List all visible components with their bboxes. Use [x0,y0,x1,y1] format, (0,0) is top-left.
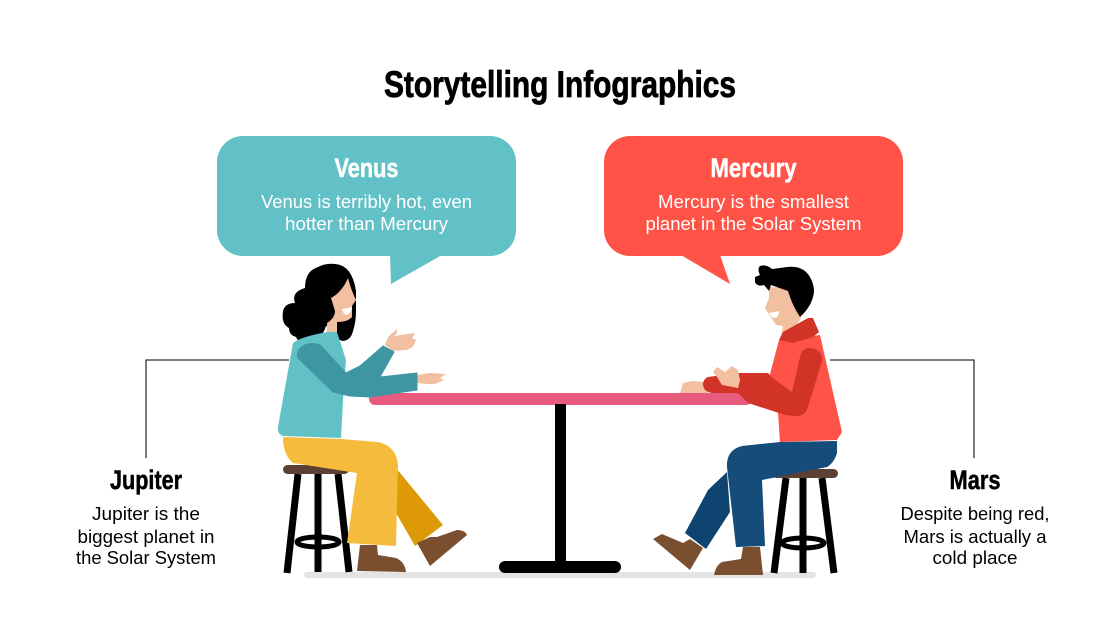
mouth [342,307,352,315]
text block: Jupiter [76,465,216,568]
text block: Mars: Mars [950,465,1000,495]
torso [278,332,346,438]
head [327,278,356,338]
lower hand [680,381,708,393]
callout: Venus speech bubble: hotter than Mercury [285,214,448,234]
front shoe [714,547,763,575]
mouth [769,311,779,318]
text block: Mars: cold place [932,548,1018,568]
woman figure [278,264,467,573]
collar [779,318,819,343]
connector: Jupiter line [146,360,289,458]
callout: Venus speech bubble: Venus [334,153,398,183]
stool: woman [283,465,349,573]
lower hand [417,373,446,384]
raised hand [385,329,416,351]
arm [703,348,822,416]
ground shadow [304,572,816,578]
arms [297,344,417,397]
hair [755,265,814,317]
back leg and shoe [653,472,730,570]
text block: Mars [900,465,1050,568]
table [369,393,752,573]
text block: Mars: Mars is actually a [904,527,1048,547]
text block: Jupiter: biggest planet in [78,527,214,547]
connector: Mars line [830,360,974,458]
front leg [727,441,837,547]
callout: Mercury speech bubble: Mercury [710,153,796,183]
callout: Mercury speech bubble [604,136,903,284]
title: Storytelling Infographics [384,64,736,105]
front shoe [357,545,406,572]
callout: Venus speech bubble [217,136,516,284]
upper hand [713,366,740,388]
torso [770,335,842,442]
callout: Mercury speech bubble: Mercury is the smallest [658,192,849,212]
text block: Jupiter: Jupiter [110,465,182,495]
hair [283,264,356,342]
callout: Venus speech bubble: Venus is terribly hot, even [261,192,472,212]
back leg and shoe [385,468,467,566]
callout: Mercury speech bubble: planet in the Solar System [646,214,862,234]
front leg [283,437,398,546]
stool: man [772,469,838,573]
text block: Jupiter: Jupiter is the [92,504,200,524]
text block: Jupiter: the Solar System [76,548,216,568]
man figure [653,265,842,575]
head [765,287,801,336]
text block: Mars: Despite being red, [900,504,1050,524]
